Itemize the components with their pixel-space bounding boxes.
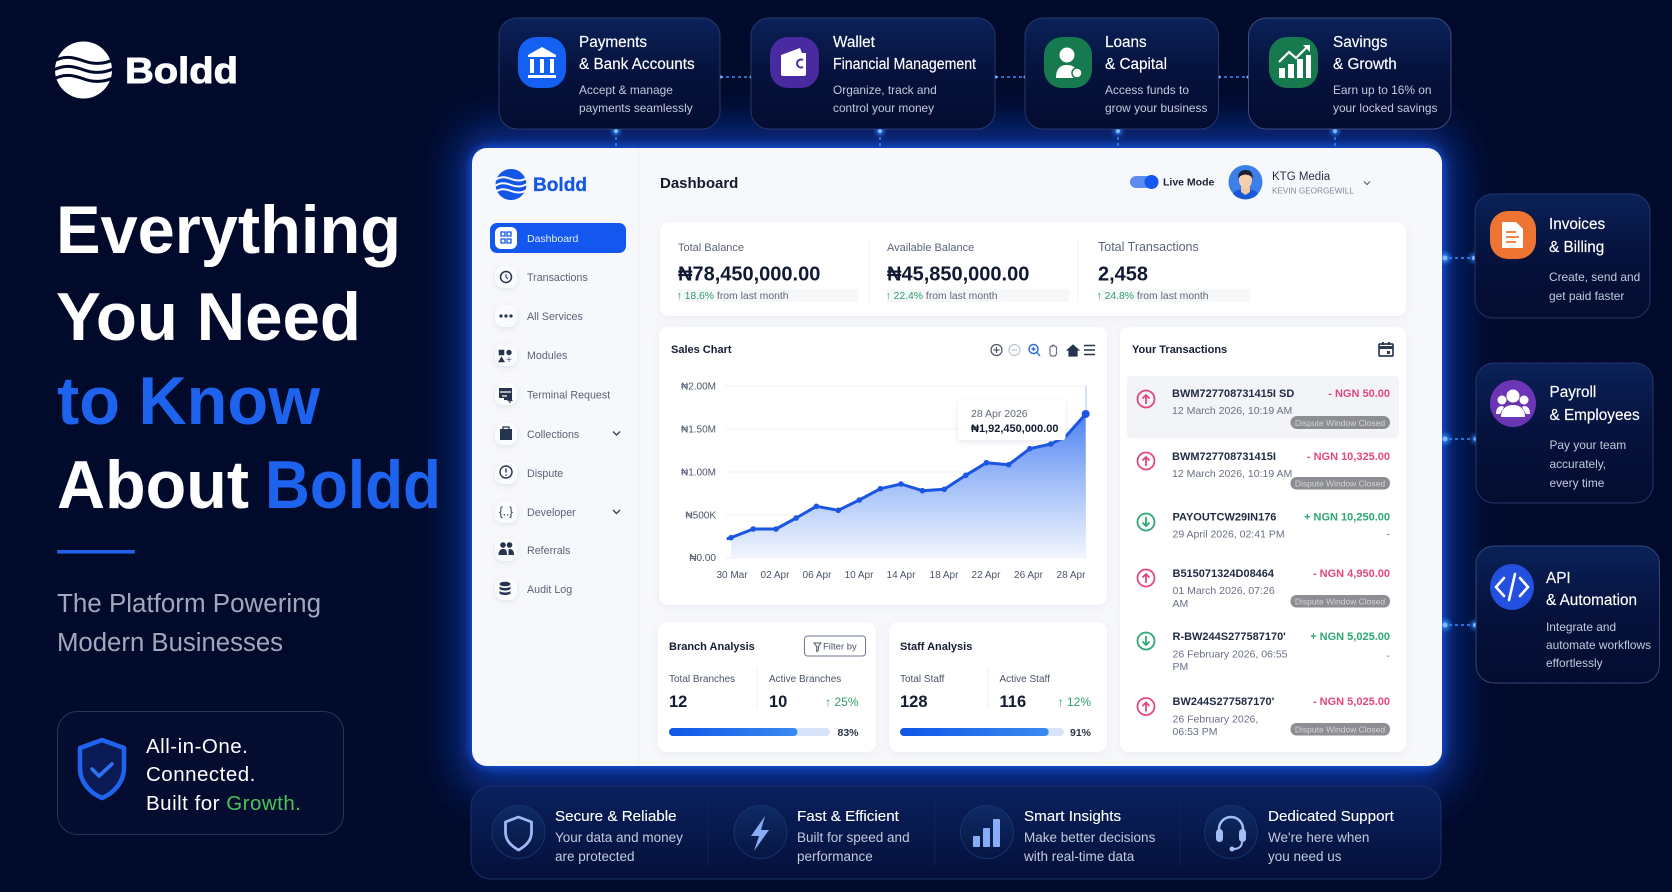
progress bar (669, 727, 859, 739)
panel: payroll card: accurately, (1550, 457, 1606, 471)
panel: staff analysis: 116 (1000, 693, 1026, 711)
heading: dashboard: Dashboard (660, 175, 738, 192)
stat: total transactions: ↑ 24.8% from last month (1096, 291, 1209, 302)
panel: sales chart (659, 327, 1107, 605)
progress bar (900, 727, 1092, 739)
nav: audit log (495, 578, 572, 600)
panel: bottom features (471, 786, 1441, 879)
transaction row 6: BW244S277587170' (1172, 696, 1275, 708)
panel: payments card: Accept & manage (579, 83, 673, 97)
callout: all-in-one (58, 712, 344, 834)
transaction row 4: AM (1172, 598, 1188, 610)
panel: staff analysis (889, 622, 1107, 752)
nav: terminal request: Terminal Request (527, 390, 610, 402)
callout text: All-in-One. (146, 735, 248, 758)
panel: invoices card: Create, send and (1549, 270, 1640, 284)
transaction row 1: BWM727708731415I SD (1172, 388, 1294, 400)
title: Everything (56, 192, 401, 268)
nav: referrals (495, 539, 570, 561)
connectors (612, 76, 1480, 630)
callout text (146, 735, 301, 815)
axis labels: ₦1.50M (681, 424, 716, 436)
panel: branch analysis: Branch Analysis (669, 641, 755, 653)
feature: support: Dedicated Support (1268, 808, 1395, 825)
logo: Boldd: Boldd (125, 50, 238, 91)
transaction row 3: PAYOUTCW29IN176 (1172, 512, 1276, 524)
transaction row 1 (1127, 376, 1399, 438)
user profile (1228, 165, 1370, 199)
title: to Know (57, 363, 321, 439)
panel: payroll card: every time (1550, 476, 1605, 490)
axis labels: ₦1.00M (681, 468, 716, 478)
transaction row 1: 12 March 2026, 10:19 AM (1172, 405, 1292, 417)
subtitle: Modern Businesses (57, 629, 283, 657)
filter button: Filter by (823, 642, 857, 652)
transaction row 6: 06:53 PM (1172, 726, 1217, 738)
transaction row 2: 12 March 2026, 10:19 AM (1172, 468, 1292, 480)
icon: growth chart (1269, 37, 1318, 88)
axis labels: 02 Apr (761, 570, 790, 581)
panel: wallet card: control your money (833, 101, 934, 115)
axis labels: 26 Apr (1014, 570, 1044, 581)
nav: all services: All Services (527, 311, 583, 323)
panel: api card: API (1546, 570, 1571, 587)
transaction row 6: - NGN 5,025.00 (1313, 696, 1390, 708)
filter button (804, 636, 866, 656)
nav: terminal request (495, 383, 610, 405)
transaction row 4: 01 March 2026, 07:26 (1172, 585, 1275, 597)
axis labels: 18 Apr (930, 570, 959, 581)
transaction row 6 (1138, 696, 1390, 738)
nav: referrals: Referrals (527, 545, 570, 557)
stat: available balance: Available Balance (887, 242, 974, 254)
nav: all services (495, 305, 583, 327)
nav: developer: Developer (527, 507, 576, 519)
feature: secure: Secure & Reliable (555, 808, 677, 825)
panel: branch analysis: Total Branches (669, 674, 735, 685)
chart tooltip: ₦1,92,450,000.00 (971, 423, 1058, 435)
accent rule (57, 550, 135, 554)
panel: loans card: & Capital (1105, 56, 1167, 73)
transaction row 2: Dispute Window Closed (1295, 478, 1385, 488)
area line chart (727, 386, 1090, 558)
feature: fast: Fast & Efficient (797, 808, 900, 825)
sidebar logo (495, 169, 587, 200)
panel: branch analysis: 12 (669, 693, 687, 711)
panel: payroll card (1476, 363, 1653, 503)
transaction row 5 (1138, 631, 1390, 673)
stat: total balance: ₦78,450,000.00 (678, 264, 820, 286)
panel: payroll card: & Employees (1550, 407, 1640, 424)
feature: secure: Your data and money (555, 830, 683, 845)
nav: modules (495, 344, 567, 366)
logo: Boldd (52, 42, 238, 98)
nav: dashboard active (490, 223, 626, 253)
panel: wallet card: Financial Management (833, 56, 977, 73)
feature: support (1204, 806, 1395, 864)
panel: api card: & Automation (1546, 592, 1637, 609)
transaction row 5: + NGN 5,025.00 (1310, 631, 1390, 643)
stat: total balance: Total Balance (678, 242, 744, 254)
panel: loans card: Access funds to (1105, 83, 1189, 97)
nav: collections: Collections (527, 429, 579, 441)
axis labels (681, 382, 1086, 581)
transaction row 1: - NGN 50.00 (1328, 388, 1390, 400)
panel: loans card: Loans (1105, 34, 1147, 51)
feature: insights: with real-time data (1023, 849, 1135, 864)
panel: dashboard (472, 148, 1442, 766)
transaction row 5: PM (1172, 661, 1188, 673)
stat: available balance (886, 242, 1029, 302)
icon: wallet (770, 37, 819, 88)
transaction row 4: B515071324D08464 (1172, 568, 1275, 580)
chart toolbar icons (991, 344, 1095, 356)
icon: calendar (1379, 342, 1393, 356)
feature: fast: performance (797, 849, 873, 864)
icon: person loan (1044, 37, 1092, 88)
feature: secure: are protected (555, 849, 635, 864)
title: About (57, 447, 249, 523)
transaction row 3: - (1386, 528, 1390, 540)
transaction row 4: - NGN 4,950.00 (1313, 568, 1390, 580)
title: You Need (56, 279, 361, 355)
axis labels: ₦2.00M (681, 382, 716, 392)
feature: insights (960, 806, 1156, 864)
panel: staff analysis: Active Staff (1000, 674, 1050, 685)
transaction row 6: 26 February 2026, (1172, 714, 1258, 726)
feature: support: We're here when (1268, 830, 1369, 845)
transaction row 5: 26 February 2026, 06:55 (1172, 648, 1288, 660)
live mode toggle (1130, 175, 1215, 189)
nav: collections (495, 423, 620, 445)
live mode toggle: Live Mode (1163, 176, 1215, 188)
stat: total transactions: Total Transactions (1098, 240, 1199, 254)
avatar (1228, 165, 1262, 199)
panel: invoices card: Invoices (1549, 216, 1605, 233)
title (56, 192, 441, 523)
stat: available balance: ↑ 22.4% from last month (886, 291, 998, 302)
nav: dispute (495, 462, 563, 484)
transaction row 3 (1138, 512, 1390, 540)
transaction row 4: Dispute Window Closed (1295, 596, 1385, 606)
panel: branch analysis: ↑ 25% (825, 695, 859, 709)
panel: savings card: your locked savings (1333, 101, 1437, 115)
panel: loans card (1025, 18, 1218, 129)
axis labels: 10 Apr (845, 570, 874, 581)
callout text: Built for Growth. (146, 792, 301, 815)
subtitle (57, 590, 321, 657)
panel: loans card: grow your business (1105, 101, 1207, 115)
panel: branch analysis: Active Branches (769, 674, 841, 685)
nav: dispute: Dispute (527, 468, 563, 480)
panel: payroll card: Pay your team (1550, 438, 1626, 452)
panel: savings card: Savings (1333, 34, 1388, 51)
transaction row 3: 29 April 2026, 02:41 PM (1172, 528, 1285, 540)
panel: sales chart: Sales Chart (671, 344, 732, 356)
panel: api card (1476, 546, 1660, 683)
chart tooltip (958, 400, 1066, 440)
icon: people (1490, 380, 1536, 427)
icon: code (1490, 564, 1534, 610)
panel: your transactions (1120, 327, 1406, 752)
subtitle: The Platform Powering (57, 590, 321, 618)
stat: total transactions (1096, 240, 1209, 302)
stat: available balance: ₦45,850,000.00 (887, 264, 1029, 286)
panel: staff analysis: Total Staff (900, 674, 945, 685)
user profile: KEVIN GEORGEWILL (1272, 186, 1354, 196)
panel: savings card: & Growth (1333, 56, 1397, 73)
nav: dashboard active: Dashboard (527, 233, 579, 245)
transaction row 5: R-BW244S277587170' (1172, 631, 1286, 643)
nav: developer: {..} (499, 506, 513, 518)
transaction row 1: Dispute Window Closed (1295, 418, 1385, 428)
panel: branch analysis: 10 (769, 693, 787, 711)
axis labels: 22 Apr (972, 570, 1001, 581)
panel: staff analysis: 128 (900, 693, 928, 711)
panel: api card: automate workflows (1546, 638, 1651, 652)
panel: payroll card: Payroll (1550, 384, 1596, 401)
callout text: Connected. (146, 763, 256, 786)
nav: audit log: Audit Log (527, 584, 572, 596)
feature: support: you need us (1268, 849, 1342, 864)
panel: balance stats (660, 222, 1406, 316)
axis labels: 06 Apr (803, 570, 832, 581)
panel: savings card (1248, 18, 1451, 129)
panel: api card: effortlessly (1546, 656, 1603, 670)
stat: total balance (676, 242, 820, 302)
panel: branch analysis (658, 622, 876, 752)
panel: your transactions: Your Transactions (1132, 344, 1227, 356)
panel: invoices card: get paid faster (1549, 289, 1624, 303)
panel: api card: Integrate and (1546, 620, 1616, 634)
axis labels: 14 Apr (887, 570, 916, 581)
feature: insights: Smart Insights (1024, 808, 1121, 825)
panel: wallet card (751, 18, 995, 129)
panel: invoices card (1475, 194, 1650, 318)
panel: invoices card: & Billing (1549, 239, 1604, 256)
feature: secure (492, 806, 683, 864)
panel: payments card: payments seamlessly (579, 101, 693, 115)
feature: fast (734, 806, 910, 864)
user profile: KTG Media (1272, 171, 1331, 183)
axis labels: ₦500K (685, 510, 716, 522)
icon: bank (518, 37, 566, 88)
axis labels: 30 Mar (716, 570, 748, 581)
stat: total transactions: 2,458 (1098, 264, 1148, 286)
panel: wallet card: Organize, track and (833, 83, 937, 97)
transaction row 2: BWM727708731415I (1172, 451, 1276, 463)
stat: total balance: ↑ 18.6% from last month (676, 291, 789, 302)
panel: payments card: Payments (579, 34, 647, 51)
transaction row 5: - (1386, 650, 1390, 662)
axis labels: 28 Apr (1057, 570, 1086, 581)
panel: payments card: & Bank Accounts (579, 56, 695, 73)
icon: shield check (80, 740, 124, 798)
feature: insights: Make better decisions (1024, 830, 1156, 845)
progress bar: 91% (1070, 727, 1092, 739)
transaction row 6: Dispute Window Closed (1295, 724, 1385, 734)
panel: staff analysis: Staff Analysis (900, 641, 972, 653)
panel: staff analysis: ↑ 12% (1058, 695, 1091, 709)
title: Boldd (265, 447, 441, 523)
transaction row 3: + NGN 10,250.00 (1304, 512, 1390, 524)
nav: modules: Modules (527, 350, 567, 362)
nav: developer (495, 501, 620, 523)
transaction row 2: - NGN 10,325.00 (1307, 451, 1390, 463)
nav: transactions: Transactions (527, 272, 588, 284)
transaction row 4 (1138, 568, 1390, 610)
feature: fast: Built for speed and (797, 830, 910, 845)
axis labels: ₦0.00 (689, 553, 716, 564)
sidebar logo: Boldd (533, 174, 587, 196)
transaction row 2 (1138, 451, 1390, 490)
icon: document (1490, 211, 1536, 259)
panel: savings card: Earn up to 16% on (1333, 83, 1432, 97)
panel: wallet card: Wallet (833, 34, 876, 51)
progress bar: 83% (837, 727, 859, 739)
nav: transactions (495, 266, 588, 288)
panel: payments card (499, 18, 720, 129)
chart tooltip: 28 Apr 2026 (971, 408, 1028, 420)
